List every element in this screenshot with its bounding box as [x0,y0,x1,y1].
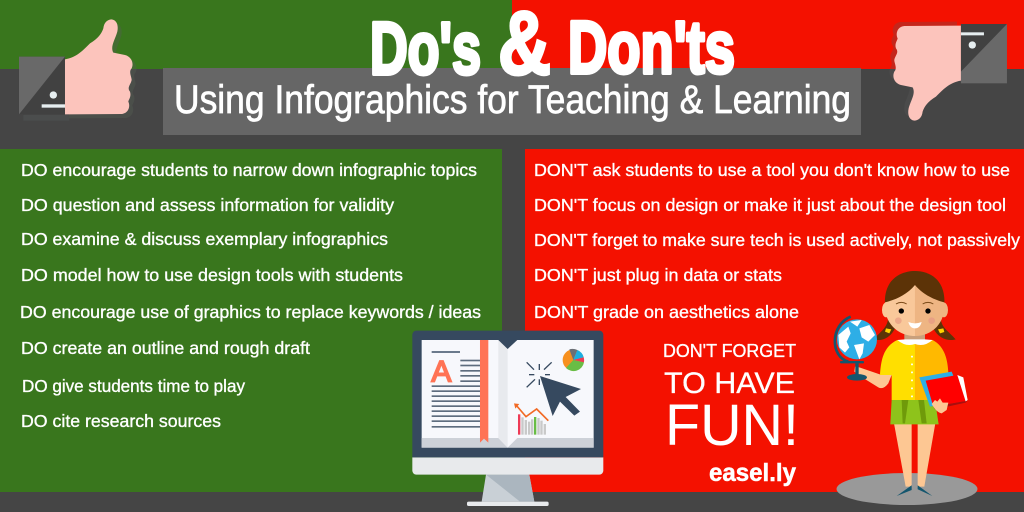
panel: do list [0,149,502,492]
globe [835,317,877,381]
callout: don't forget to have fun: FUN! [665,393,799,458]
do item 7: DO give students time to play [22,376,245,396]
do item 5: DO encourage use of graphics to replace keywords / ideas [20,302,481,322]
title: Do's [370,7,481,90]
shoes [897,485,932,496]
icon: thumbs down [889,22,1007,121]
illustration: monitor with open book [412,331,603,506]
illustration: girl with globe and books [835,271,968,496]
neck [904,332,925,342]
do item 2: DO question and assess information for validity [21,195,394,215]
title [370,0,735,94]
panel: subtitle banner [163,68,861,135]
panel: don't list [525,149,1024,492]
do item 8: DO cite research sources [21,411,221,431]
don't item 1: DON'T ask students to use a tool you don't know how to use [534,160,1010,180]
logo: easel.ly: easel.ly [709,459,796,487]
illustration: monitor with open book: A [431,356,451,389]
title: Don'ts [568,6,735,89]
don't item 4: DON'T just plug in data or stats [534,265,782,285]
don't item 2: DON'T focus on design or make it just about the design tool [534,195,1006,215]
don't item 3: DON'T forget to make sure tech is used actively, not passively [534,230,1020,250]
callout: don't forget to have fun: DON'T FORGET [663,341,796,361]
icon: thumbs up [19,19,137,121]
shadow ellipse under girl [836,473,978,505]
do item 1: DO encourage students to narrow down infographic topics [21,160,477,180]
skirt [890,400,939,424]
arm holding globe [854,367,892,388]
legs [894,423,935,487]
callout: don't forget to have fun [663,341,799,458]
don't item 5: DON'T grade on aesthetics alone [534,302,799,322]
books [919,372,968,413]
hair and pigtails [873,271,956,340]
dress [880,339,948,400]
face [882,285,948,336]
subtitle: Using Infographics for Teaching & Learning [174,78,851,122]
do item 4: DO model how to use design tools with students [21,265,403,285]
do item 3: DO examine & discuss exemplary infographics [21,229,388,249]
callout: don't forget to have fun: TO HAVE [664,367,795,400]
do item 6: DO create an outline and rough draft [21,338,310,358]
